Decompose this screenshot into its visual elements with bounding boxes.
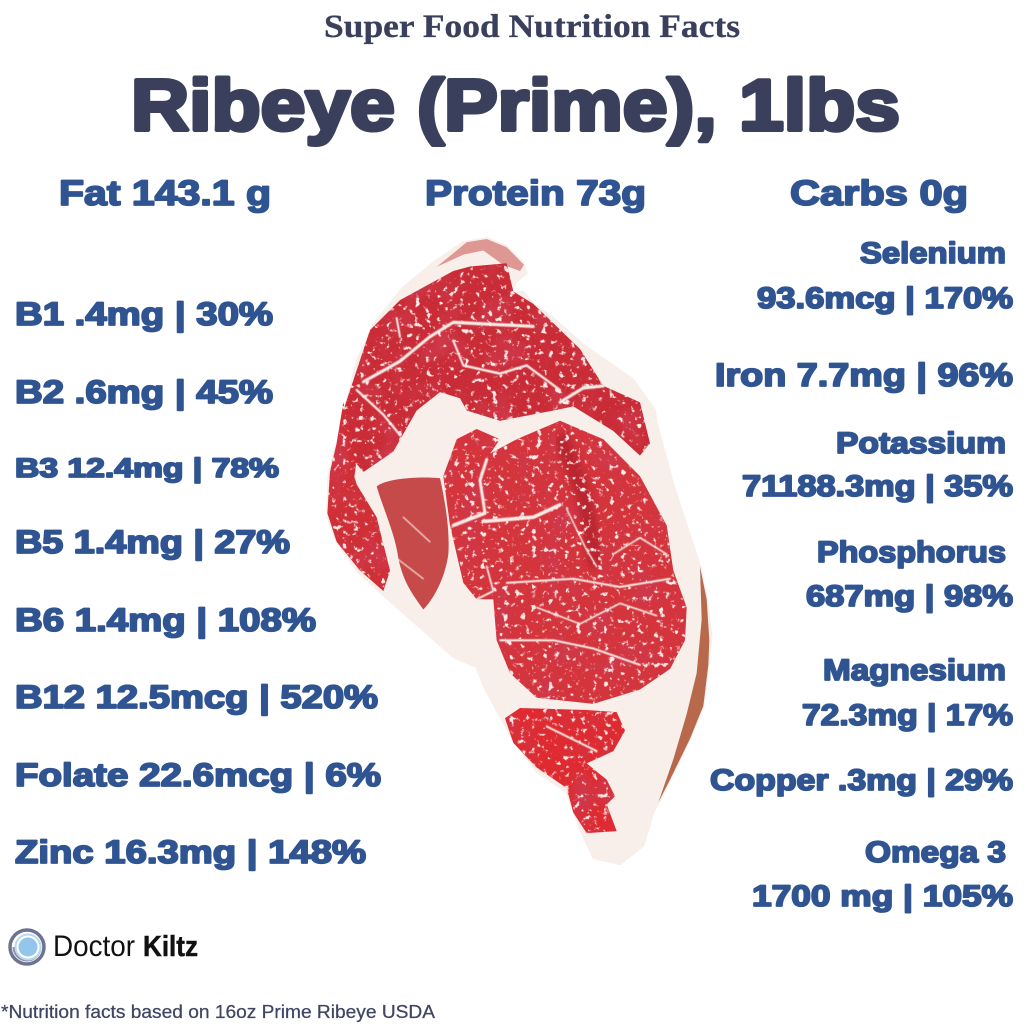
right column: minerals: Phosphorus [817, 536, 1006, 569]
left column: vitamins [15, 296, 381, 870]
title: Ribeye (Prime), 1lbs [131, 66, 900, 146]
top edge [437, 239, 524, 271]
pink inner muscle [377, 477, 449, 610]
right column: minerals: 71188.3mg | 35% [742, 470, 1013, 503]
right column: minerals: Iron 7.7mg | 96% [715, 357, 1013, 393]
right column: minerals: Potassium [836, 427, 1006, 460]
right column: minerals: 93.6mcg | 170% [757, 282, 1013, 315]
right column: minerals: Selenium [860, 237, 1006, 270]
logo: Doctor Kiltz: Kiltz [143, 931, 198, 963]
left column: vitamins: B12 12.5mcg | 520% [15, 679, 378, 715]
right column: minerals: 687mg | 98% [806, 580, 1013, 613]
right column: minerals: Copper .3mg | 29% [710, 764, 1013, 797]
illustration: ribeye steak [320, 230, 720, 870]
macronutrient headings: Protein 73g [425, 174, 646, 213]
logo: Doctor Kiltz [10, 930, 198, 964]
left column: vitamins: Folate 22.6mcg | 6% [15, 757, 381, 793]
steak fat outline [327, 238, 712, 864]
marbling texture [328, 264, 686, 833]
logo icon [10, 930, 44, 964]
left column: vitamins: B1 .4mg | 30% [15, 296, 273, 332]
macronutrient headings: Carbs 0g [790, 174, 968, 213]
left column: vitamins: B2 .6mg | 45% [15, 374, 273, 410]
logo: Doctor Kiltz: Doctor [53, 930, 135, 963]
brown outer edge [658, 566, 709, 802]
footnote: *Nutrition facts based on 16oz Prime Ribeye USDA [1, 1002, 435, 1022]
muscle areas [327, 263, 687, 833]
macronutrient headings: Fat 143.1 g [59, 174, 271, 213]
left column: vitamins: B6 1.4mg | 108% [15, 602, 316, 638]
right column: minerals: Omega 3 [865, 836, 1006, 869]
right column: minerals: 1700 mg | 105% [752, 880, 1013, 913]
left column: vitamins: B3 12.4mg | 78% [15, 453, 279, 483]
fat seams [357, 318, 670, 751]
right column: minerals: 72.3mg | 17% [802, 699, 1013, 732]
left column: vitamins: B5 1.4mg | 27% [15, 524, 290, 560]
left column: vitamins: Zinc 16.3mg | 148% [15, 834, 366, 870]
right column: minerals [710, 237, 1013, 913]
subtitle: Super Food Nutrition Facts [324, 9, 740, 45]
macronutrient headings [59, 174, 968, 213]
right column: minerals: Magnesium [823, 654, 1006, 687]
